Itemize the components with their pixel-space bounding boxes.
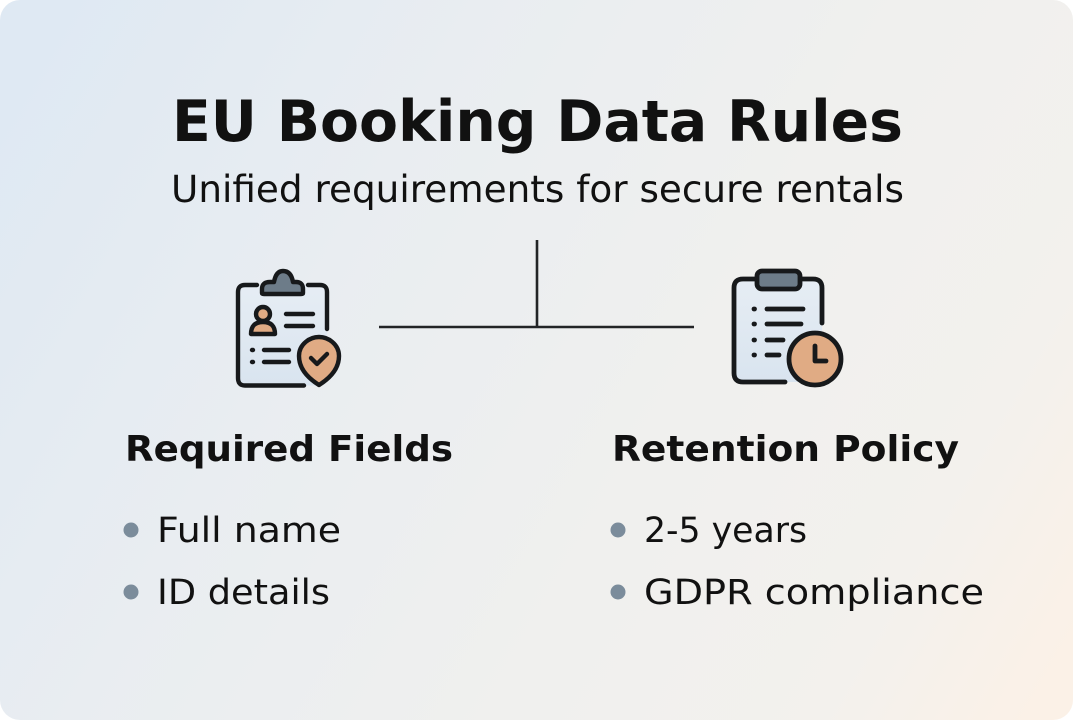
list: retention policy	[610, 511, 984, 613]
icon: clipboard with person and shield	[238, 271, 339, 386]
heading: Retention Policy: Retention Policy	[612, 429, 959, 470]
subtitle: Unified requirements for secure rentals	[171, 168, 904, 211]
list: required fields	[124, 511, 341, 613]
title: EU Booking Data Rules	[172, 89, 903, 155]
list: required fields: ID details	[157, 573, 330, 613]
list: retention policy: 2-5 years	[644, 511, 807, 551]
heading: Required Fields: Required Fields	[125, 429, 453, 470]
list: retention policy: GDPR compliance	[644, 573, 984, 613]
connector: branching lines	[379, 240, 694, 327]
list: required fields: Full name	[157, 511, 341, 551]
icon: clipboard with clock	[734, 271, 841, 385]
